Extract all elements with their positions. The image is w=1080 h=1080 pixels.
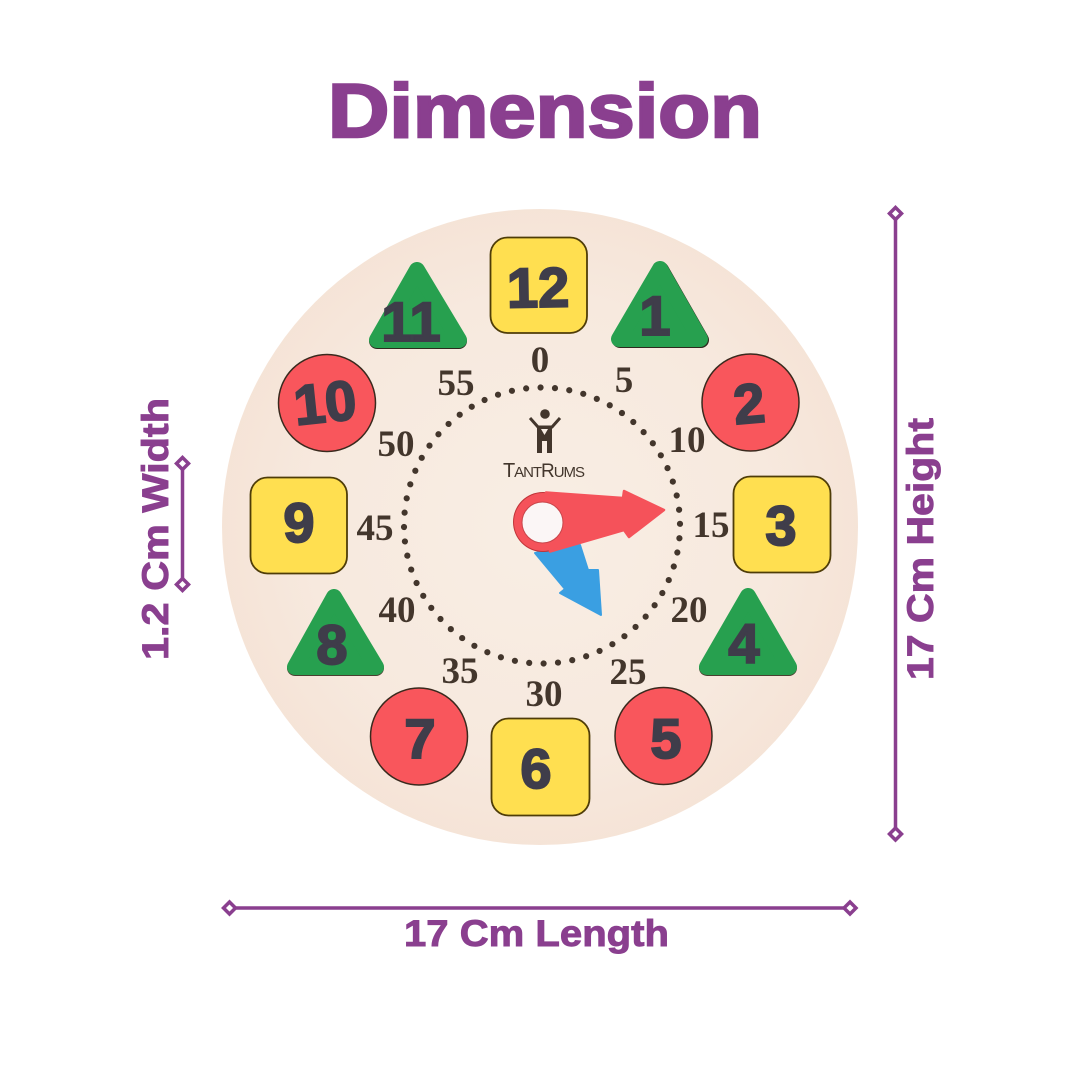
title: Dimension [328,69,762,154]
piece 7 [370,688,468,785]
minute labels: 30 [526,674,562,715]
piece 12 [490,238,587,333]
piece 4 [707,596,789,675]
blue minute hand [535,545,601,615]
piece 9 [250,478,347,574]
minute labels: 5 [615,360,633,401]
piece 8: 8 [316,613,348,676]
minute labels: 25 [610,652,646,693]
minute labels: 50 [378,424,414,465]
minute dots ring [402,386,682,665]
piece 6: 6 [520,737,552,800]
minute labels [356,340,730,715]
logo: Tantrums [503,409,585,482]
minute labels: 10 [668,420,706,461]
logo: Tantrums: TANTRUMS [503,460,585,482]
piece 1: 1 [639,284,671,347]
piece 1 [619,269,700,347]
piece 4: 4 [728,612,760,675]
minute labels: 35 [442,651,478,692]
height measure line [890,208,902,840]
piece 2: 2 [731,371,767,436]
piece 6 [492,718,590,816]
piece 3 [734,476,830,572]
red hour hand [513,491,664,552]
piece 3: 3 [765,494,797,557]
length measure line [224,902,856,914]
piece 8 [295,597,376,676]
piece 12: 12 [506,255,570,320]
minute labels: 40 [378,590,416,631]
piece 7: 7 [404,707,436,770]
width label: 1.2 Cm Width [135,398,176,660]
length label: 17 Cm Length [404,913,669,954]
minute labels: 55 [438,363,474,404]
minute labels: 15 [692,505,730,546]
minute labels: 20 [670,590,708,631]
piece 11 [377,270,459,353]
piece 9: 9 [283,491,315,554]
piece 5 [615,688,712,784]
piece 2 [702,354,799,451]
piece 5: 5 [650,707,682,770]
height label: 17 Cm Height [900,418,941,680]
piece 11: 11 [381,290,441,353]
minute labels: 45 [356,508,394,549]
piece 10: 10 [291,368,359,437]
piece 10 [278,354,376,452]
width measure line [176,458,188,590]
clock board [222,209,858,845]
minute labels: 0 [531,340,549,381]
